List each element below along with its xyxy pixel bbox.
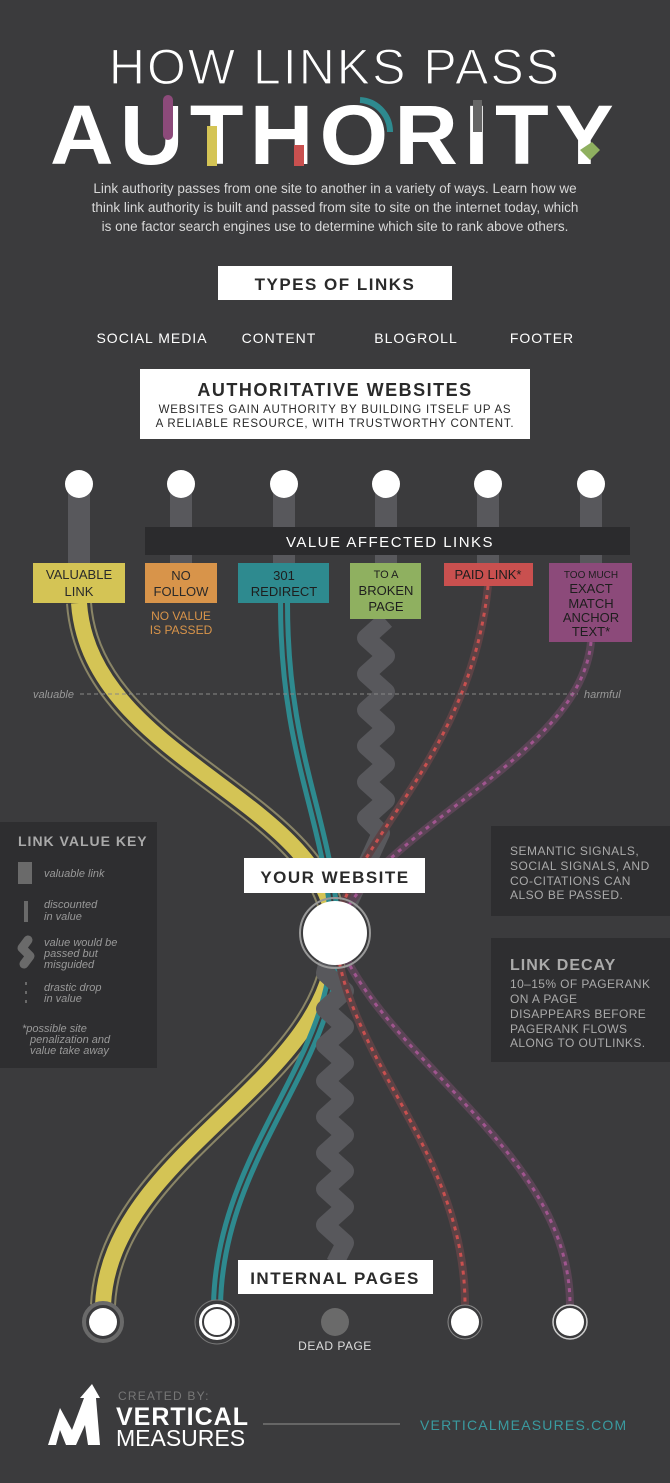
panel: semantic signals — [491, 826, 670, 916]
label: valuable link: LINK — [65, 584, 94, 599]
title — [50, 39, 620, 182]
footer logo — [48, 1384, 249, 1451]
panel: link value key: LINK VALUE KEY — [18, 833, 148, 849]
label: paid link: PAID LINK* — [455, 567, 521, 582]
value affected links bar: VALUE AFFECTED LINKS — [286, 534, 494, 551]
panel: link value key: valuable link — [44, 868, 105, 880]
panel: link value key: discounted — [44, 899, 98, 911]
link types row: FOOTER — [510, 330, 574, 346]
label: exact match: MATCH — [568, 596, 614, 611]
panel: link value key: value would be — [44, 937, 117, 949]
flow lines — [79, 586, 591, 1305]
valuable-harmful scale: harmful — [584, 689, 621, 701]
panel: link value key: in value — [44, 993, 82, 1005]
panel: link value key — [0, 822, 157, 1068]
authoritative websites box: A RELIABLE RESOURCE, WITH TRUSTWORTHY CONTENT. — [156, 418, 514, 430]
label: no follow: FOLLOW — [154, 584, 209, 599]
panel: link value key: penalization and — [29, 1034, 111, 1046]
panel: link value key: drastic drop — [44, 982, 101, 994]
label: broken page — [350, 563, 421, 619]
intro text: is one factor search engines use to determine which site to rank above others. — [102, 219, 568, 234]
your website label: YOUR WEBSITE — [260, 868, 410, 887]
footer url: VERTICALMEASURES.COM — [420, 1417, 627, 1433]
panel: link value key: passed but — [43, 948, 99, 960]
authoritative websites box: AUTHORITATIVE WEBSITES — [197, 380, 473, 400]
label: paid link — [444, 563, 533, 586]
panel: semantic signals: ALSO BE PASSED. — [510, 888, 623, 902]
panel: link value key: *possible site — [22, 1023, 87, 1035]
panel: link decay: ON A PAGE — [510, 992, 577, 1006]
label: broken page: TO A — [374, 569, 399, 581]
authoritative websites box: WEBSITES GAIN AUTHORITY BY BUILDING ITSELF UP AS — [159, 404, 511, 416]
panel: link decay: 10–15% OF PAGERANK — [510, 977, 650, 991]
panel: link value key: misguided — [44, 959, 95, 971]
label: 301 redirect: REDIRECT — [251, 584, 317, 599]
label: 301 redirect — [238, 563, 329, 603]
dead page label: DEAD PAGE — [298, 1339, 372, 1353]
your website circle — [300, 898, 370, 968]
intro text — [92, 181, 578, 234]
label: no follow: NO VALUE — [151, 609, 211, 623]
internal pages label: INTERNAL PAGES — [250, 1269, 420, 1288]
label: exact match: ANCHOR — [563, 610, 619, 625]
link types row — [96, 330, 574, 346]
source circles — [65, 470, 605, 498]
panel: semantic signals: SOCIAL SIGNALS, AND — [510, 859, 650, 873]
label: valuable link: VALUABLE — [46, 567, 112, 582]
footer logo: VERTICAL — [116, 1403, 249, 1431]
footer logo: MEASURES — [116, 1425, 245, 1451]
title: AUTHORITY — [50, 88, 620, 182]
label: 301 redirect: 301 — [273, 568, 295, 583]
panel: semantic signals: SEMANTIC SIGNALS, — [510, 844, 639, 858]
label: broken page: PAGE — [368, 599, 404, 614]
label: no follow: NO — [171, 568, 191, 583]
panel: link decay: PAGERANK FLOWS — [510, 1022, 627, 1036]
valuable-harmful scale — [33, 689, 621, 701]
label: exact match: TEXT* — [572, 624, 610, 639]
value affected links bar — [145, 527, 630, 555]
panel: link decay — [491, 938, 670, 1062]
intro text: Link authority passes from one site to another in a variety of ways. Learn how we — [93, 181, 577, 196]
footer divider — [263, 1423, 400, 1425]
internal pages label — [238, 1260, 433, 1294]
footer logo: CREATED BY: — [118, 1389, 210, 1403]
authoritative websites box — [140, 369, 530, 439]
title: HOW LINKS PASS — [109, 39, 561, 95]
panel: link decay: DISAPPEARS BEFORE — [510, 1007, 646, 1021]
valuable-harmful scale: valuable — [33, 689, 74, 701]
heading: types of links — [218, 266, 452, 300]
label: no follow: IS PASSED — [150, 623, 213, 637]
link types row: SOCIAL MEDIA — [96, 330, 208, 346]
heading: types of links: TYPES OF LINKS — [255, 275, 415, 294]
label: exact match — [549, 563, 632, 642]
internal page nodes — [84, 1300, 587, 1344]
link types row: CONTENT — [242, 330, 316, 346]
label: broken page: BROKEN — [359, 583, 413, 598]
link types row: BLOGROLL — [374, 330, 458, 346]
panel: link value key: value take away — [30, 1045, 110, 1057]
source stems — [68, 484, 602, 564]
panel: semantic signals: CO-CITATIONS CAN — [510, 874, 631, 888]
panel: link value key: in value — [44, 911, 82, 923]
label: exact match: EXACT — [569, 581, 613, 596]
your website label — [244, 858, 425, 893]
label: valuable link — [33, 563, 125, 603]
panel: link decay: ALONG TO OUTLINKS. — [510, 1036, 645, 1050]
panel: link decay: LINK DECAY — [510, 957, 616, 974]
intro text: think link authority is built and passed from site to site on the internet today, which — [92, 200, 578, 215]
label: exact match: TOO MUCH — [564, 570, 618, 581]
label: no follow — [145, 563, 217, 637]
